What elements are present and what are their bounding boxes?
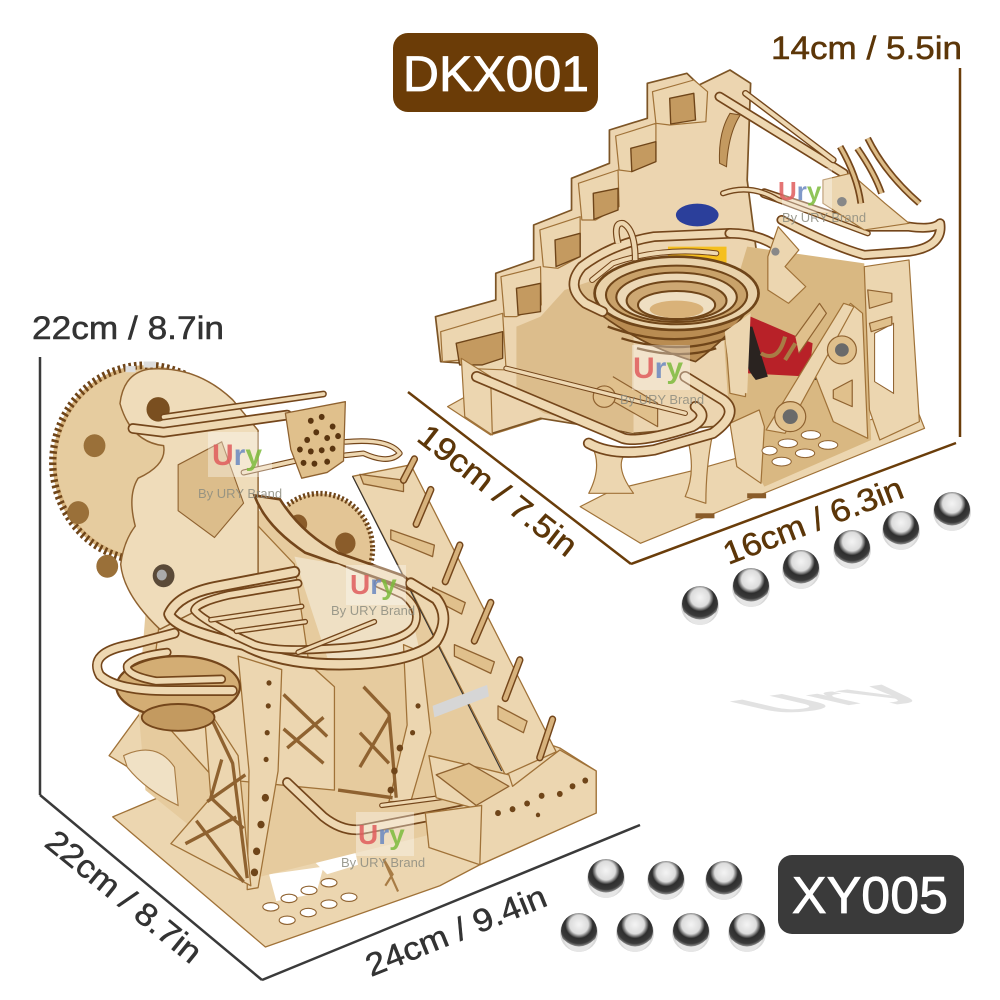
motor, blue cap and red battery	[668, 204, 845, 380]
steel balls: DKX001 set	[681, 492, 971, 625]
watermark logo upper left: Ury	[212, 439, 262, 472]
label: 24cm / 9.4in: 24cm / 9.4in	[360, 878, 552, 983]
label: 22cm / 8.7in depth: 22cm / 8.7in	[39, 823, 209, 970]
funnel spiral rings	[595, 257, 759, 330]
watermark logo upper right: Ury	[778, 176, 822, 206]
descending spiral chute	[254, 495, 425, 668]
diagonal brace	[761, 303, 856, 433]
central support panels	[120, 361, 334, 790]
faint Ury shadow watermark: Ury	[708, 678, 943, 719]
badge: DKX001	[393, 33, 598, 112]
model DKX001: wooden stair marble run	[435, 70, 940, 543]
watermark logo middle left: By URY Brand	[331, 603, 415, 618]
label: 19cm / 7.5in: 19cm / 7.5in	[411, 417, 585, 564]
large gear	[53, 365, 238, 578]
plate storage holes	[263, 879, 357, 924]
storage holes on base	[762, 431, 838, 466]
badge: DKX001: DKX001	[403, 46, 589, 102]
bottom exit rail	[287, 782, 476, 830]
lower track loop	[461, 358, 730, 503]
label: 14cm / 5.5in: 14cm / 5.5in	[771, 30, 962, 66]
watermark logo lower left: By URY Brand	[341, 855, 425, 870]
watermark logo centre right: Ury	[633, 352, 683, 385]
badge: XY005: XY005	[792, 867, 948, 925]
perforated end box	[384, 750, 596, 892]
label: 16cm / 6.3in: 16cm / 6.3in	[718, 470, 908, 572]
watermark logo centre right	[620, 345, 704, 407]
watermark logo middle left	[331, 565, 415, 618]
watermark logo upper left: By URY Brand	[198, 486, 282, 501]
left spiral track	[97, 633, 233, 691]
watermark logo lower left	[341, 812, 425, 870]
front tower left	[171, 656, 282, 890]
model XY005: wooden gear marble run	[53, 361, 596, 947]
watermark logo upper left	[198, 432, 282, 501]
steel balls: XY005 set	[560, 859, 766, 952]
top feeder rail	[133, 394, 400, 472]
staircase lift ramp	[353, 459, 556, 775]
upper track loop	[723, 138, 940, 255]
watermark logo upper right	[778, 168, 866, 225]
right frame legs	[725, 260, 919, 483]
stair shadow wall	[516, 267, 634, 433]
small rear gear	[267, 494, 373, 604]
watermark logo upper right: By URY Brand	[782, 210, 866, 225]
perforated hopper	[285, 402, 345, 478]
watermark logo centre right: By URY Brand	[620, 392, 704, 407]
front tower right	[284, 645, 489, 802]
machinery interior backdrop	[723, 247, 871, 487]
rails to upper chute	[719, 93, 844, 173]
rear spiral under track	[116, 656, 240, 805]
watermark logo middle left: Ury	[350, 569, 397, 600]
stair back wall	[435, 70, 759, 433]
base plates	[448, 393, 925, 543]
badge: XY005	[778, 855, 964, 934]
funnel cone	[599, 303, 752, 393]
central wood mass	[138, 495, 502, 878]
stair step boxes	[441, 80, 708, 370]
main oval tracks	[169, 572, 443, 664]
label: 22cm / 8.7in height: 22cm / 8.7in	[32, 310, 224, 346]
base plate	[109, 694, 596, 947]
watermark logo lower left: Ury	[358, 819, 405, 850]
funnel outer track with ball arch	[574, 223, 806, 312]
